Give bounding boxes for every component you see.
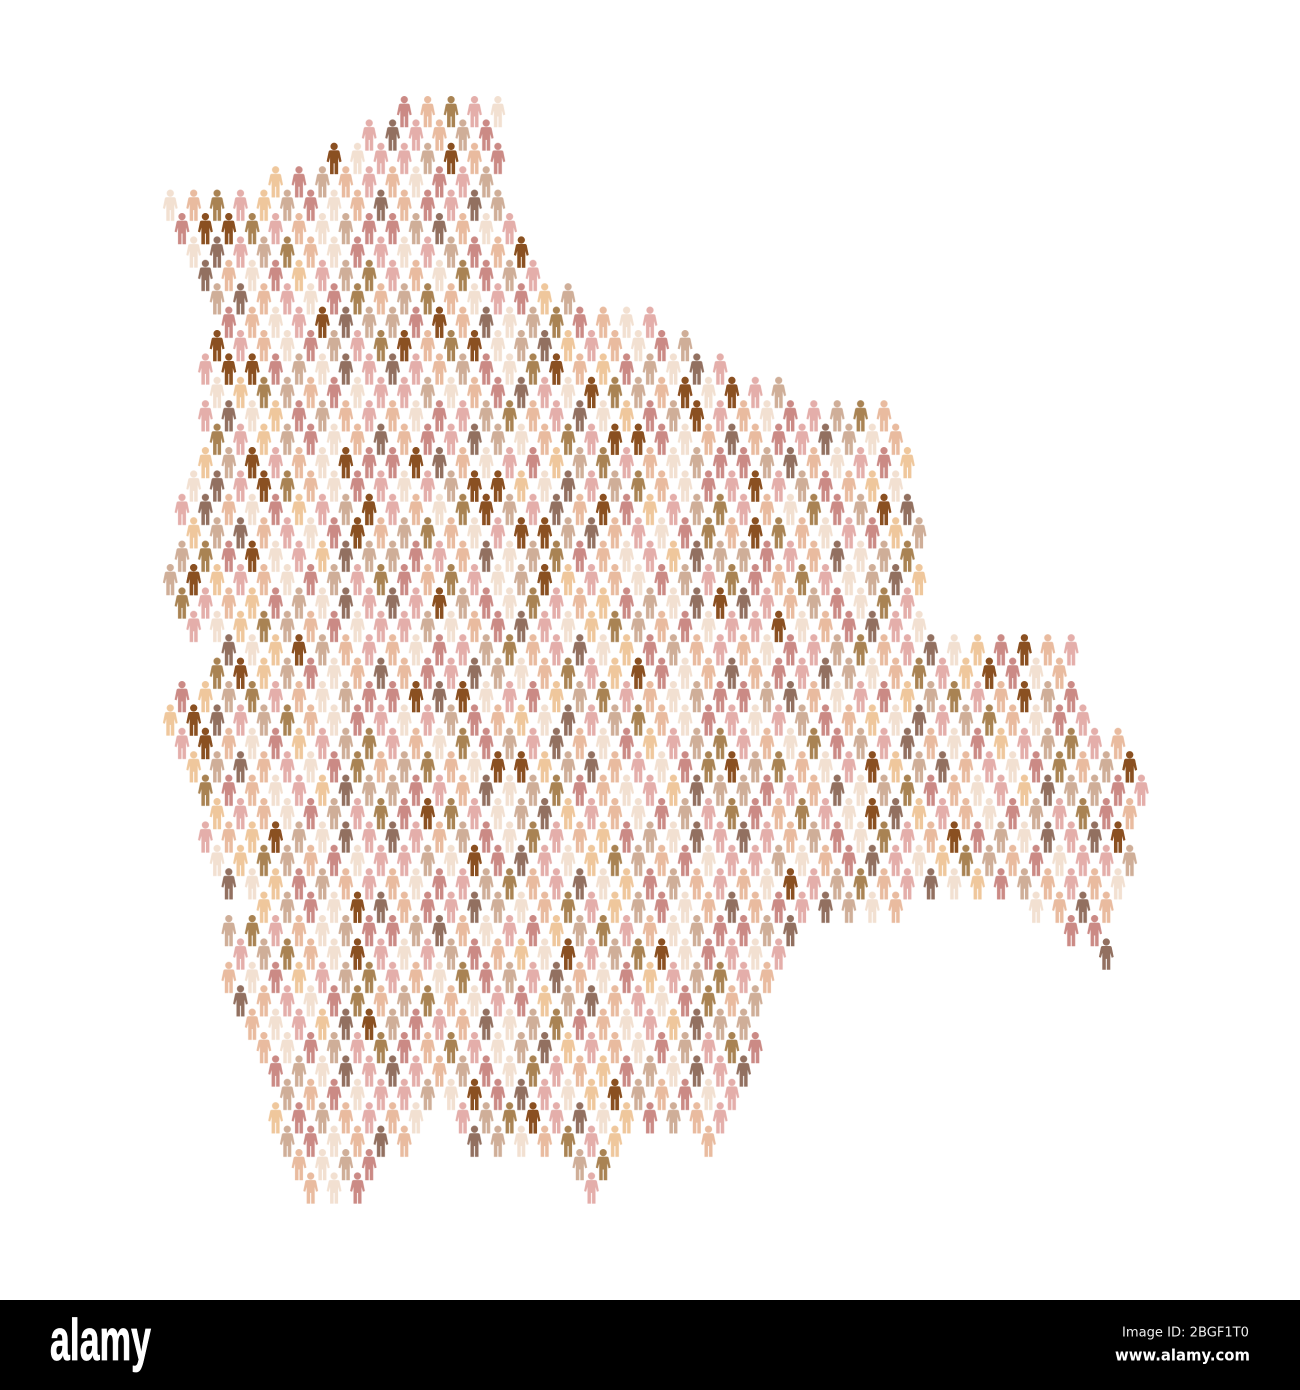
figures: dark brown accents	[186, 143, 1137, 1134]
website URL: www.alamy.com	[1115, 1346, 1250, 1364]
footer bar	[0, 1300, 1300, 1390]
logo: alamy wordmark: alamy	[50, 1308, 151, 1373]
figures: central region	[159, 399, 931, 644]
figures: southern region	[217, 891, 1118, 1205]
map: Bolivia formed from stick figures	[159, 95, 1153, 1205]
image ID: Image ID: 2BGF1T0	[1122, 1326, 1249, 1340]
figures: southeastern tip	[1099, 938, 1114, 970]
figures: northern region	[159, 95, 790, 410]
figures: eastern and middle region	[159, 633, 1153, 901]
